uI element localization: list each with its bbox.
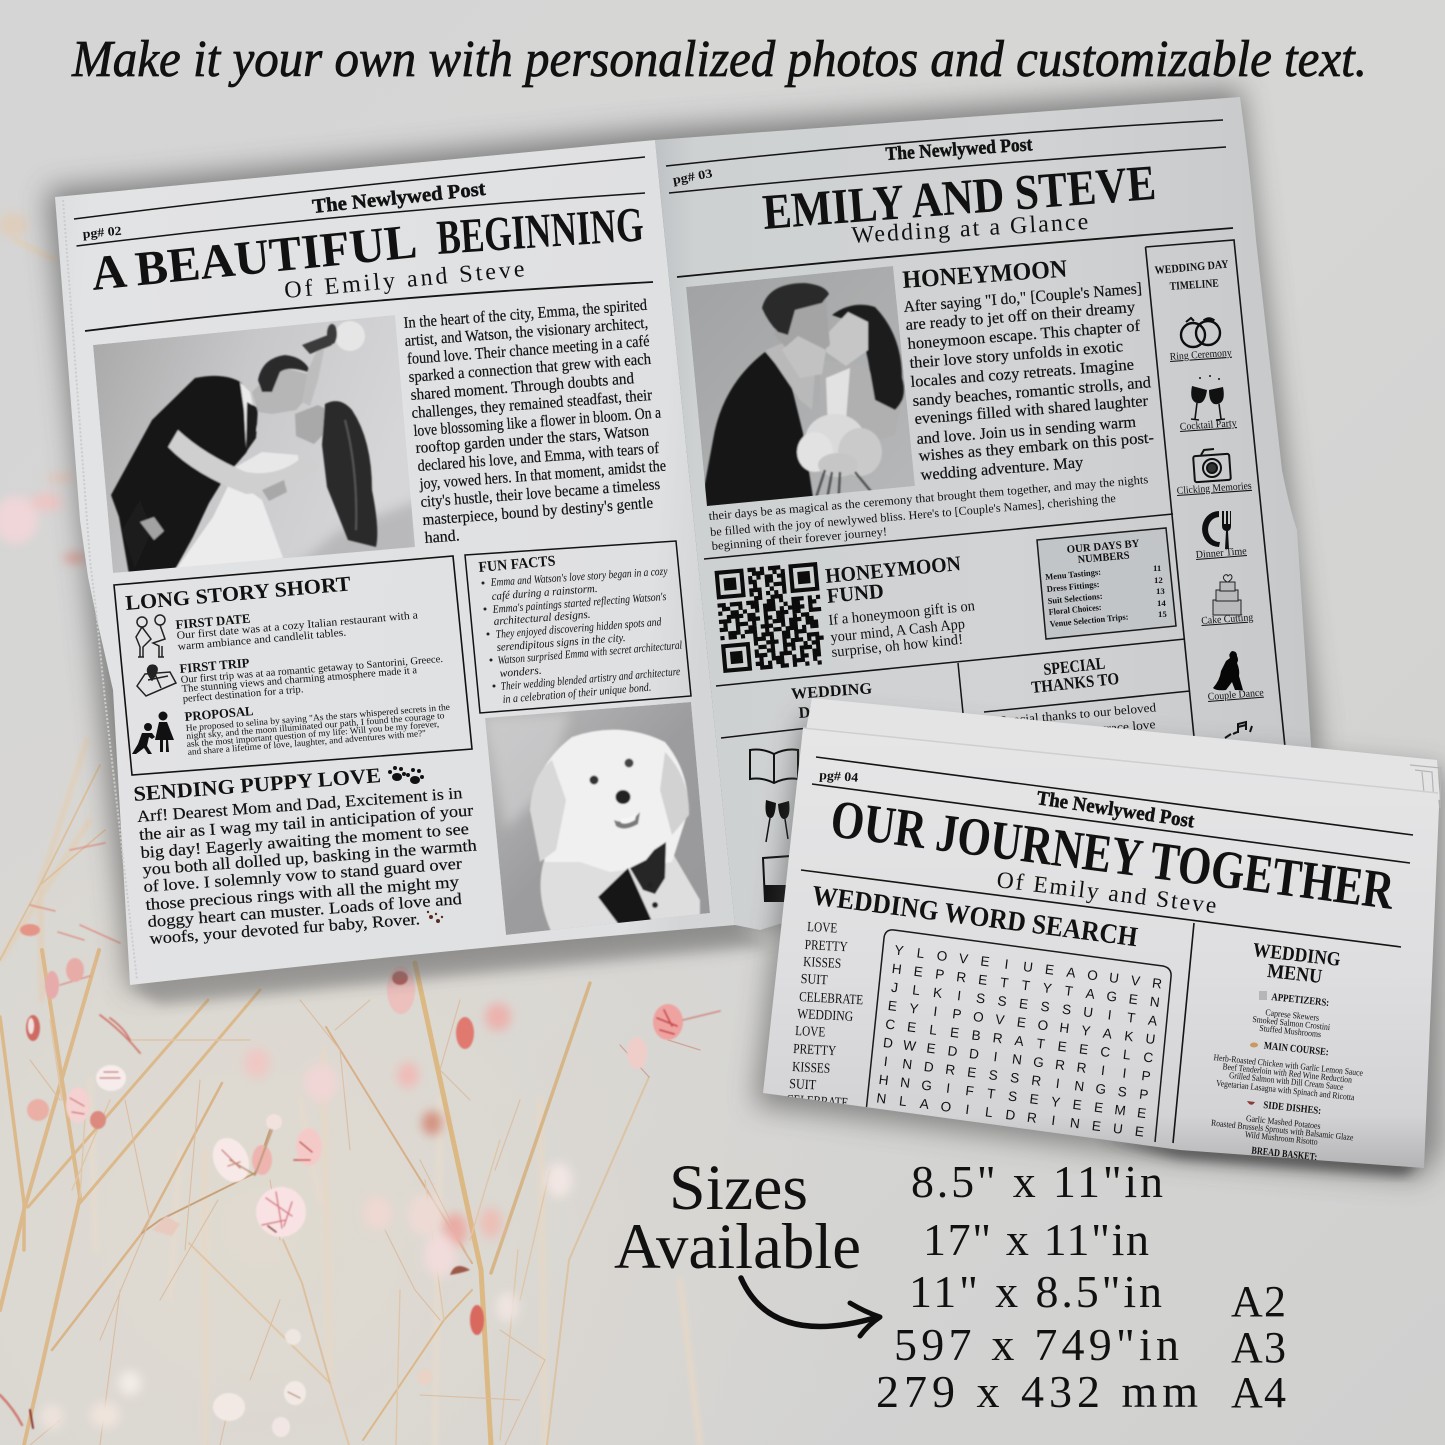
panel: our days by numbers: Menu Tastings: <box>1045 567 1101 582</box>
heading: wedding details: WEDDING <box>791 680 873 703</box>
article: hand. <box>424 527 460 547</box>
article: shared moment. Through doubts and <box>410 370 635 404</box>
word list: CELEBRATE <box>799 990 863 1008</box>
panel: long story short <box>114 556 472 775</box>
page edge stitching <box>63 200 137 980</box>
photo: couple kissing <box>686 266 915 510</box>
panel: folded newspaper <box>763 698 1441 1168</box>
panel: fun facts: Watson surprised Emma with secret architectural <box>497 640 683 667</box>
panel: our days by numbers: 13 <box>1156 586 1165 596</box>
heading: wedding details <box>791 680 873 722</box>
wedding menu: Herb-Roasted Chicken with Garlic Lemon Sauce <box>1213 1052 1363 1078</box>
sizes list: 11" x 8.5"in <box>909 1266 1162 1317</box>
panel: long story short: Our first date was at a cozy Italian restaurant with a <box>176 609 418 642</box>
paper formats <box>1231 1277 1286 1417</box>
icon: plate and cutlery <box>1202 511 1231 549</box>
panel: our days by numbers: Dress Fittings: <box>1046 579 1100 594</box>
panel: fun facts: in a celebration of their unique bond. <box>502 682 652 706</box>
honeymoon article: wedding adventure. May <box>920 454 1084 484</box>
wedding menu: APPETIZERS: <box>1271 992 1330 1009</box>
panel: long story short: The stunning views and charming atmosphere made it a <box>181 665 418 695</box>
sizes list <box>876 1156 1198 1417</box>
panel: long story short: Our first trip was at aa romantic getaway to Santorini, Greece. <box>180 654 443 686</box>
icon: proposal <box>132 712 174 754</box>
top fold flap <box>805 698 1440 800</box>
honeymoon fund <box>824 551 976 661</box>
word search grid: HNGIFTSEYEEME <box>878 1072 1147 1121</box>
honeymoon article: locales and cozy retreats. Imagine <box>910 356 1135 391</box>
page rules <box>801 757 1413 1143</box>
panel: our days by numbers: 15 <box>1158 609 1167 619</box>
honeymoon fund: your mind, A Cash App <box>830 616 966 646</box>
panel: long story short: perfect destination for a trip. <box>182 684 304 705</box>
panel: wedding day timeline: Couple Dance <box>1207 688 1264 703</box>
article: sparked a connection that grew with each <box>408 351 652 386</box>
icon: paw prints <box>388 766 424 784</box>
page rules <box>666 120 1233 738</box>
panel: long story short: FIRST DATE <box>175 611 251 632</box>
icon: open book <box>750 750 798 783</box>
word search grid: DWEDDINGRRIIP <box>882 1035 1151 1084</box>
arrow <box>741 1278 880 1336</box>
icon: camera <box>1193 449 1231 482</box>
word list <box>786 920 863 1111</box>
letter from the dog: you both all dolled up, basking in the warmth <box>142 835 478 879</box>
paper formats: A2 <box>1231 1277 1286 1326</box>
article: joy, vowed hers. In that moment, amidst the <box>418 458 667 493</box>
article: challenges, they remained steadfast, their <box>411 387 653 422</box>
article: love blossoming like a flower in bloom. On a <box>413 404 662 440</box>
panel: fun facts: wonders. <box>499 665 542 680</box>
panel: our days by numbers: OUR DAYS BY <box>1066 538 1140 556</box>
wedding menu: SIDE DISHES: <box>1263 1100 1322 1117</box>
heading: special thanks: Special thanks to our beloved <box>999 700 1157 728</box>
panel: wedding day timeline: Cake Cutting <box>1201 612 1254 627</box>
honeymoon article continued <box>708 472 1149 553</box>
wedding menu: Caprese Skewers <box>1265 1007 1320 1023</box>
letter from the dog <box>136 783 478 948</box>
honeymoon article continued: their days be as magical as the ceremony that brought them together, and may the nights <box>708 472 1149 523</box>
honeymoon fund: HONEYMOON <box>824 551 962 588</box>
honeymoon article: After saying "I do," [Couple's Names] <box>903 280 1143 316</box>
honeymoon article: their love story unfolds in exotic <box>909 338 1124 372</box>
panel: fun facts: They enjoyed discovering hidden spots and <box>495 616 662 641</box>
masthead: The Newlywed Post <box>885 134 1034 165</box>
menu icons <box>1247 991 1267 1105</box>
honeymoon article: honeymoon escape. This chapter of <box>907 318 1141 353</box>
panel: wedding day timeline: Dinner Time <box>1195 546 1247 561</box>
icon: dancing couple <box>1213 651 1243 690</box>
panel: long story short: PROPOSAL <box>184 703 254 724</box>
blurred blossoms <box>0 213 572 1430</box>
wedding menu: Smoked Salmon Crostini <box>1252 1014 1331 1032</box>
icon: drink <box>763 856 791 901</box>
wedding menu: Stuffed Mushrooms <box>1259 1023 1322 1039</box>
panel: wedding day timeline: TIMELINE <box>1169 278 1219 293</box>
article <box>403 297 667 547</box>
icon: small paw <box>427 911 443 923</box>
letter from the dog: those precious rings with all the might my <box>145 872 460 914</box>
word list: KISSES <box>792 1060 831 1077</box>
photo: dog in bow tie <box>485 702 710 942</box>
wedding menu: Vegetarian Lasagna with Spinach and Ricotta <box>1216 1078 1355 1102</box>
page sheet <box>655 97 1312 930</box>
icon: cocktail glasses <box>1191 375 1225 420</box>
folded newspaper shadow <box>755 718 1443 1178</box>
panel: our days by numbers <box>1037 528 1176 639</box>
wedding menu: Garlic Mashed Potatoes <box>1245 1113 1322 1131</box>
word search grid: YLOVEIUEAOUVR <box>894 943 1163 992</box>
word search grid <box>866 930 1171 1142</box>
page number: pg# 04 <box>819 767 859 785</box>
honeymoon article continued: be filled with the joy of newlywed bliss. Here's to [Couple's Names], cherishing the <box>710 491 1116 539</box>
panel: left page <box>55 140 735 985</box>
panel: fun facts: serendipitous signs in the city. <box>496 632 626 654</box>
heading: special thanks <box>999 654 1157 736</box>
word list: CELEBRATE <box>786 1093 848 1111</box>
panel: fun facts: café during a rainstorm. <box>491 583 598 603</box>
panel: long story short: night sky, and the moon illuminated our path, I found the courage to <box>186 710 445 741</box>
wedding menu: WEDDING <box>1252 939 1342 971</box>
sizes list: 279 x 432 mm <box>876 1366 1198 1417</box>
headline: A BEAUTIFUL <box>89 213 419 301</box>
panel: wedding day timeline: Clicking Memories <box>1176 481 1252 497</box>
heading: honeymoon: HONEYMOON <box>902 256 1068 294</box>
heading: special thanks: SPECIAL <box>1042 654 1106 679</box>
honeymoon fund: FUND <box>826 579 885 608</box>
heading: sending puppy love: SENDING PUPPY LOVE <box>133 763 382 806</box>
sheet <box>763 728 1439 1168</box>
article: found love. Their chance meeting in a café <box>407 333 650 368</box>
word list: SUIT <box>789 1077 817 1093</box>
word list: WEDDING <box>797 1007 853 1025</box>
headline: EMILY AND STEVE <box>761 154 1158 240</box>
subheadline: Of Emily and Steve <box>995 867 1218 919</box>
icon: couple holding hands <box>136 615 165 657</box>
masthead: The Newlywed Post <box>311 178 487 218</box>
honeymoon article continued: beginning of their forever journey! <box>711 524 888 553</box>
word search grid: HEPRETTYTAGEN <box>891 961 1161 1010</box>
word list: PRETTY <box>804 938 848 955</box>
title: Make it your own with personalized photos and customizable text. <box>71 31 1367 88</box>
sizes list: 17" x 11"in <box>923 1214 1149 1265</box>
icon: music notes <box>1225 722 1252 738</box>
letter from the dog: of love. I solemnly vow to stand guard over <box>143 854 463 896</box>
wedding menu: Beef Tenderloin with Red Wine Reduction <box>1222 1061 1353 1085</box>
panel: long story short: warm ambiance and candlelit tables. <box>177 627 347 653</box>
article: rooftop garden under the stars, Watson <box>415 422 650 457</box>
panel: long story short: FIRST TRIP <box>179 655 250 676</box>
article: artist, and Watson, the visionary architect, <box>404 315 649 350</box>
icon: wedding cake <box>1213 575 1241 615</box>
heading: word search: WEDDING WORD SEARCH <box>810 880 1140 953</box>
page sheet <box>55 140 735 985</box>
word search grid: JLKISSESSUITA <box>890 980 1159 1029</box>
QR code <box>714 562 826 673</box>
panel: wedding day timeline: Cocktail Party <box>1179 418 1238 433</box>
shadow under the folded newspaper <box>1100 1138 1420 1175</box>
wedding menu: Grilled Salmon with Dill Cream Sauce <box>1229 1070 1344 1092</box>
wedding menu: Wild Mushroom Risotto <box>1244 1129 1319 1147</box>
panel: our days by numbers: Floral Choices: <box>1048 602 1102 617</box>
honeymoon fund: surprise, oh how kind! <box>831 632 964 661</box>
honeymoon article: evenings filled with shared laughter <box>914 393 1149 428</box>
letter from the dog: Arf! Dearest Mom and Dad, Excitement is in <box>136 783 463 826</box>
panel: long story short: He proposed to selina by saying "As the stars whispered secrets in the <box>185 702 450 733</box>
word list: KISSES <box>803 955 842 972</box>
article: In the heart of the city, Emma, the spirited <box>403 297 648 332</box>
word search grid: EYIPOVEOHYAKU <box>887 998 1156 1047</box>
paper formats: A3 <box>1231 1323 1286 1372</box>
panel: our days by numbers: NUMBERS <box>1077 550 1130 566</box>
word list: LOVE <box>807 920 838 937</box>
sizes list: 8.5" x 11"in <box>911 1156 1163 1207</box>
panel: wedding day timeline <box>1146 240 1285 747</box>
page number: pg# 03 <box>672 166 713 187</box>
panel: long story short: and share a lifetime of love, laughter, and adventures with me?" <box>187 728 427 757</box>
icon: toast glasses <box>766 800 790 842</box>
page shadows <box>47 88 1318 990</box>
page number: pg# 02 <box>82 224 122 241</box>
headline: BEGINNING <box>435 196 645 265</box>
panel: fun facts: Their wedding blended artistry and architecture <box>500 666 681 693</box>
honeymoon article: wishes as they embark on this post- <box>918 430 1155 465</box>
wedding menu <box>1211 939 1363 1163</box>
panel: right page <box>655 97 1312 930</box>
dried flowers background <box>0 213 720 1445</box>
page rules <box>74 157 653 331</box>
heading: special thanks: THANKS TO <box>1030 669 1120 697</box>
shadow under the open spread <box>130 925 770 1005</box>
letter from the dog: the air as I wag my tail in anticipation of your <box>138 800 474 844</box>
article: city's hustle, their love became a timeless <box>420 476 661 511</box>
paper formats: A4 <box>1231 1368 1286 1417</box>
panel: fun facts <box>465 541 691 713</box>
word search grid: INDRESSRINGSP <box>883 1054 1149 1103</box>
word list: SUIT <box>800 972 828 988</box>
wedding menu: MAIN COURSE: <box>1263 1041 1329 1058</box>
sizes heading <box>614 1152 861 1283</box>
sizes heading: Available <box>614 1211 861 1283</box>
word list: LOVE <box>795 1024 826 1041</box>
icon: rings <box>1181 318 1220 347</box>
honeymoon article: are ready to jet off on their dreamy <box>905 299 1136 334</box>
letter from the dog: woofs, your devoted fur baby, Rover. <box>149 909 421 948</box>
icon: map pin <box>137 665 176 696</box>
panel: wedding day timeline: WEDDING DAY <box>1154 259 1230 277</box>
panel: fun facts: architectural designs. <box>493 609 591 628</box>
honeymoon article: and love. Join us in sending warm <box>916 414 1137 448</box>
sizes heading: Sizes <box>669 1152 808 1224</box>
heading: special thanks: grace love <box>1099 717 1157 736</box>
honeymoon fund: If a honeymoon gift is on <box>828 598 976 629</box>
subheadline: Wedding at a Glance <box>851 209 1089 249</box>
panel: long story short: ask the most important question of my life: Will you be my forever, <box>186 719 439 749</box>
paper stack edge <box>1410 765 1441 808</box>
headline <box>89 196 645 301</box>
honeymoon article <box>903 280 1155 484</box>
letter from the dog: big day! Eagerly awaiting the moment to see <box>140 819 469 862</box>
wedding menu: BREAD BASKET: <box>1251 1146 1318 1163</box>
panel: wedding day timeline: Ring Ceremony <box>1169 348 1233 363</box>
panel: our days by numbers: Venue Selection Trips: <box>1049 611 1129 629</box>
panel: our days by numbers: Suit Selections: <box>1047 591 1103 606</box>
wedding menu: MENU <box>1266 960 1323 988</box>
panel: long story short: LONG STORY SHORT <box>124 571 352 615</box>
panel: fun facts: Emma and Watson's love story began in a cozy <box>490 566 669 589</box>
word search grid: CELEBRATEECLC <box>884 1016 1154 1066</box>
wedding menu: Roasted Brussels Sprouts with Balsamic Glaze <box>1211 1118 1354 1142</box>
subheadline: Of Emily and Steve <box>283 256 526 304</box>
photo: dancing couple <box>93 315 420 580</box>
sharp blossoms <box>0 843 720 1437</box>
panel: our days by numbers: 12 <box>1154 575 1163 585</box>
honeymoon article: sandy beaches, romantic strolls, and <box>912 374 1152 410</box>
panel: our days by numbers: 14 <box>1157 598 1166 608</box>
article: declared his love, and Emma, with tears of <box>417 440 660 475</box>
panel: fun facts: Emma's paintings started reflecting Watson's <box>491 591 667 616</box>
panel: fun facts: FUN FACTS <box>478 553 556 576</box>
word list: PRETTY <box>793 1042 837 1059</box>
masthead: The Newlywed Post <box>1035 787 1196 832</box>
heading: wedding details: DI <box>798 704 817 722</box>
letter from the dog: doggy heart can muster. Loads of love and <box>147 889 463 931</box>
panel: our days by numbers: 11 <box>1153 563 1161 573</box>
word search grid: NLAOILDRINEUE <box>876 1090 1145 1140</box>
article: masterpiece, bound by destiny's gentle <box>422 495 654 529</box>
sizes list: 597 x 749"in <box>894 1319 1179 1370</box>
